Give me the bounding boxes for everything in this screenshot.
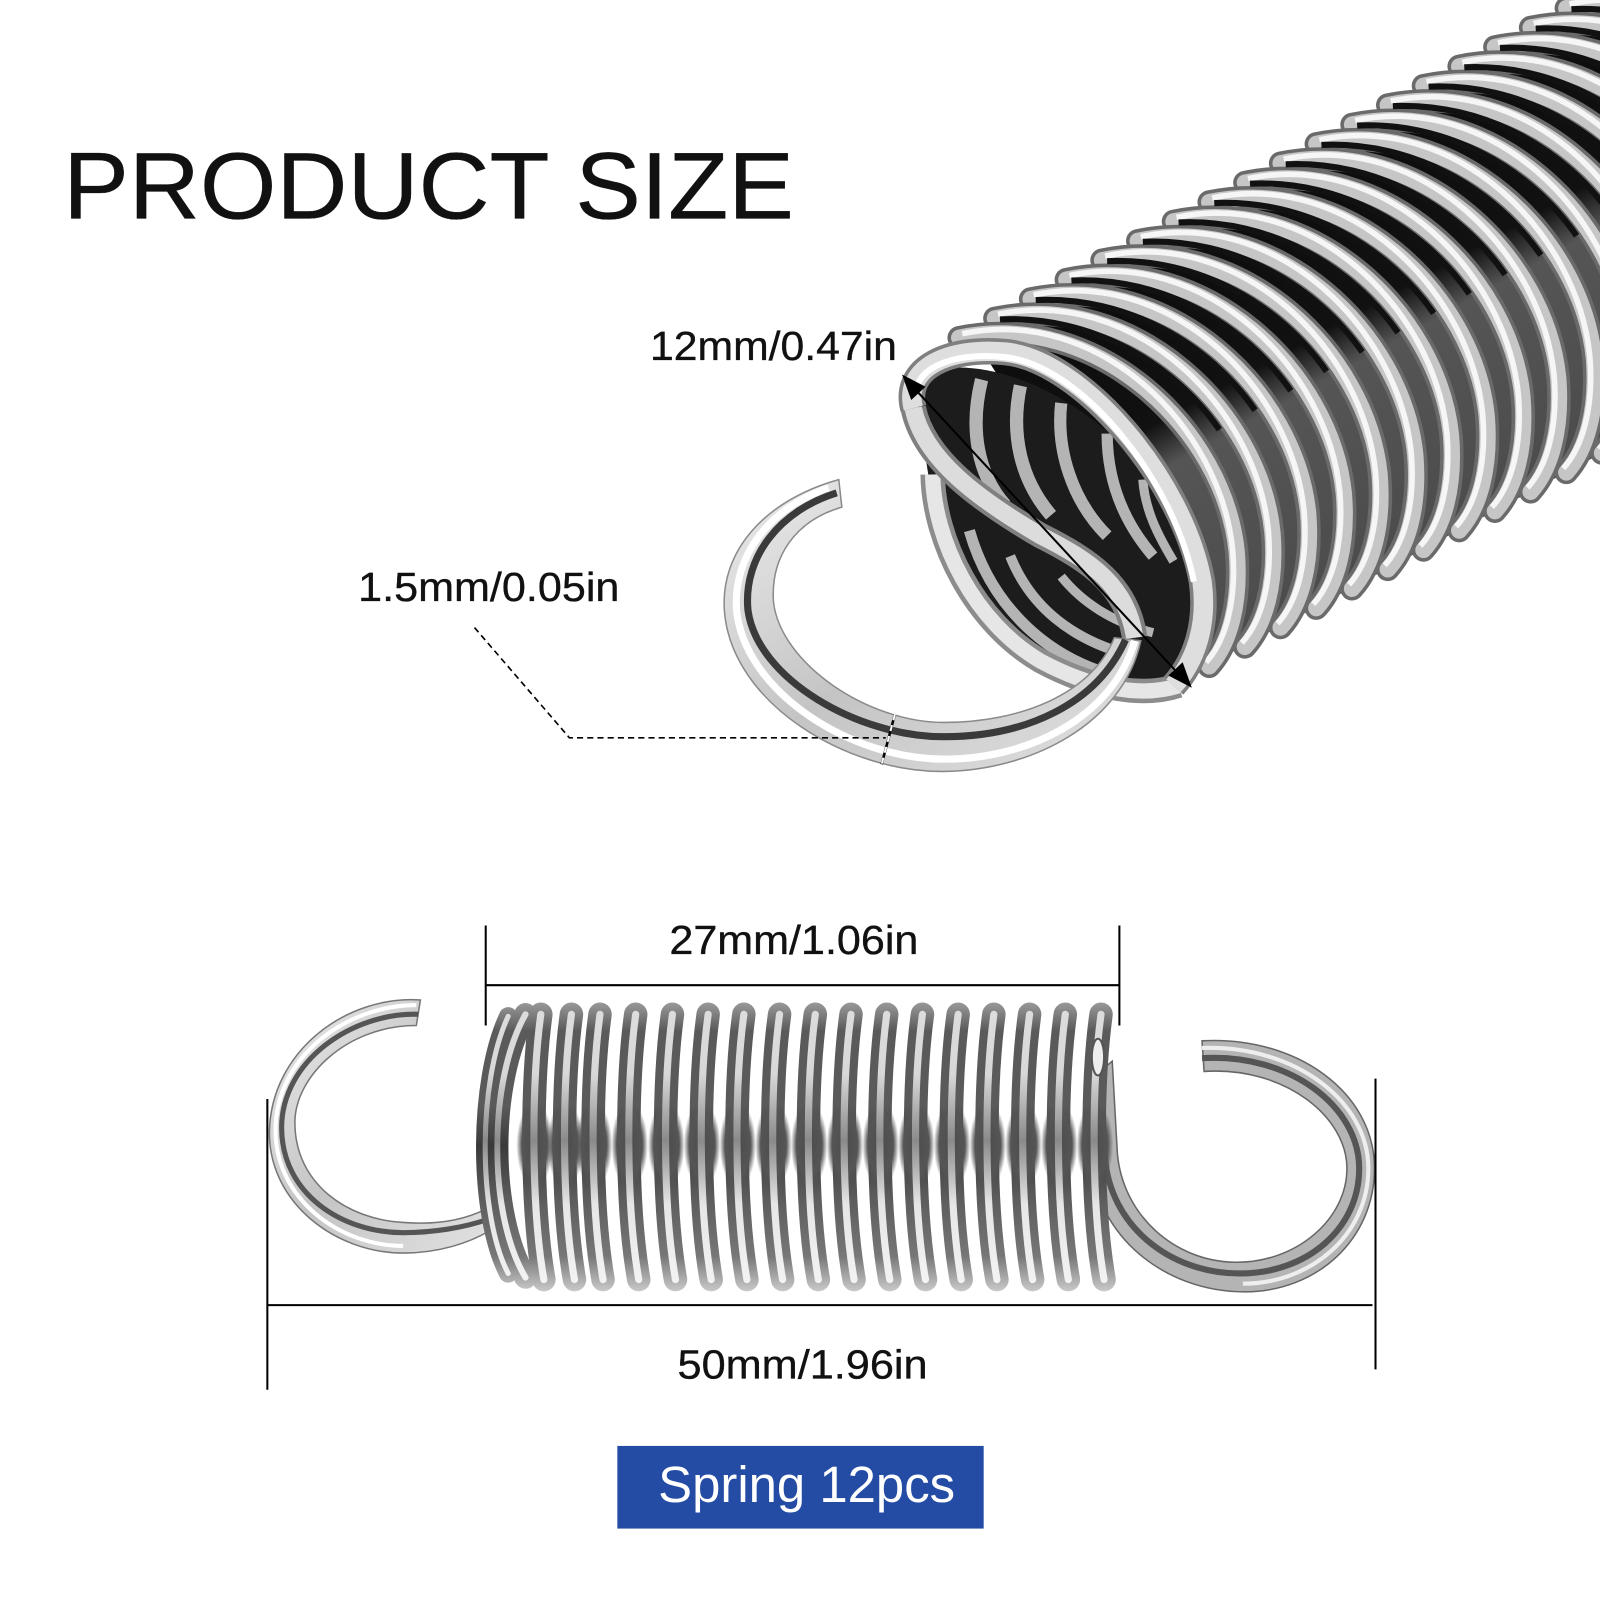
leftmost curved coils	[485, 1014, 526, 1278]
label: overall length: 50mm/1.96in	[678, 1342, 928, 1388]
title: PRODUCT SIZE	[63, 133, 794, 239]
end coil eyelet	[1092, 1039, 1104, 1076]
diagonal loop of spring	[913, 408, 1135, 638]
dimension: coil length	[486, 926, 1119, 1026]
quantity badge	[617, 1446, 984, 1529]
spring interior opening	[913, 367, 1194, 690]
back ring of spring	[933, 474, 1179, 691]
right hook	[1088, 1040, 1374, 1292]
quantity badge: Spring 12pcs	[658, 1456, 955, 1513]
close-up spring illustration	[724, 0, 1600, 771]
label: diameter: 12mm/0.47in	[650, 323, 897, 369]
spring body dark cylinder	[980, 15, 1600, 676]
close-up hook	[724, 480, 1141, 771]
spring coils	[516, 1014, 1113, 1280]
spring coils	[959, 0, 1600, 666]
left hook	[269, 1000, 490, 1253]
dimension: overall length	[267, 1079, 1376, 1390]
full spring illustration	[269, 1000, 1374, 1292]
label: coil length: 27mm/1.06in	[669, 917, 918, 963]
arrow: spring diameter	[902, 374, 1192, 688]
leader: wire thickness	[474, 628, 895, 764]
front ring of spring	[912, 351, 1203, 686]
interior coils	[969, 380, 1173, 673]
label: wire thickness: 1.5mm/0.05in	[358, 564, 619, 610]
